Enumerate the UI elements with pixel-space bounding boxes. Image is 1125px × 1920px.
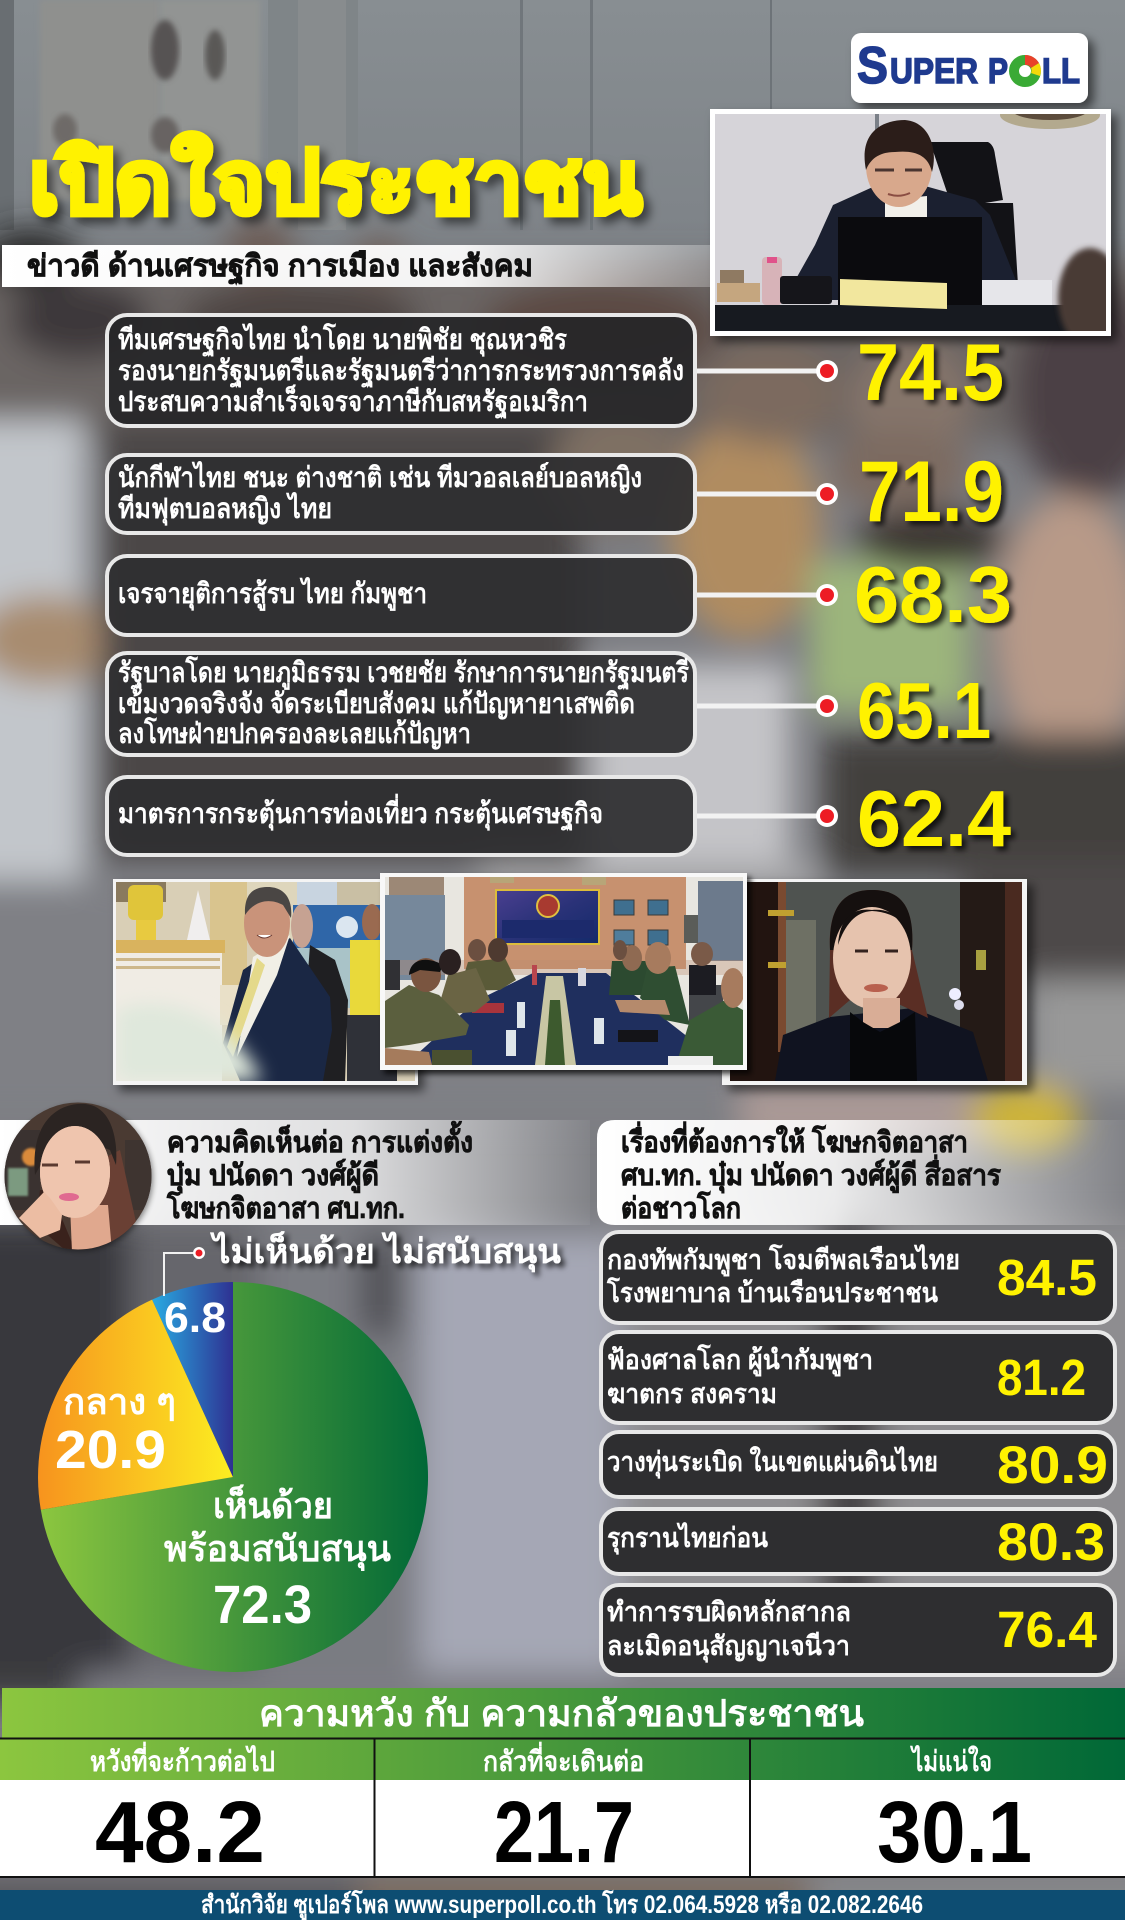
issue row 2: 81.2 — [997, 1349, 1086, 1406]
slice: disagree 6.8 — [152, 1282, 233, 1477]
header band: issues to communicate — [597, 1120, 1125, 1225]
issue row 4 — [601, 1509, 1115, 1574]
logo wordmark: P — [988, 52, 1008, 91]
slice: agree 72.3 — [41, 1282, 428, 1672]
dot 3 — [816, 584, 838, 606]
photo: military meeting — [380, 873, 747, 1070]
header text left: ความคิดเห็นต่อ การแต่งตั้ง — [167, 1120, 473, 1159]
value 71.9: 71.9 — [859, 444, 1004, 540]
legend callout: disagree: ไม่เห็นด้วย ไม่สนับสนุน — [210, 1230, 561, 1273]
dot 4 — [816, 695, 838, 717]
news item 3 — [107, 556, 695, 635]
issue row 1: โรงพยาบาล บ้านเรือนประชาชน — [606, 1276, 938, 1308]
news item 5 — [107, 777, 695, 855]
header text right: ต่อชาวโลก — [621, 1190, 741, 1225]
logo donut — [1014, 55, 1041, 82]
label support: พร้อมสนับสนุน — [164, 1528, 391, 1572]
news item 1 — [107, 315, 695, 426]
header text right — [621, 1121, 1001, 1225]
label 6.8: 6.8 — [164, 1294, 226, 1342]
issue row 3 — [601, 1432, 1115, 1497]
subtitle band — [2, 245, 710, 287]
news item 4: รัฐบาลโดย นายภูมิธรรม เวชยชัย รักษาการนายกรัฐมนตรี — [118, 655, 689, 691]
news item 2 — [107, 455, 695, 533]
header band: opinion on appointment — [0, 1120, 590, 1225]
column header row: หวังที่จะก้าวต่อไป — [90, 1741, 275, 1777]
issue row 4: รุกรานไทยก่อน — [607, 1522, 768, 1555]
title: เปิดใจประชาชน — [29, 132, 642, 232]
portrait circle — [4, 1102, 153, 1252]
column header row — [0, 1739, 1125, 1780]
legend callout: disagree — [164, 1230, 561, 1296]
table title bar: ความหวัง กับ ความกลัวของประชาชน — [259, 1693, 864, 1734]
issue row 2 — [601, 1332, 1115, 1423]
news item 4 — [107, 653, 695, 755]
logo wordmark: S — [857, 37, 888, 95]
news item 1: ทีมเศรษฐกิจไทย นำโดย นายพิชัย ชุณหวชิร — [118, 322, 567, 358]
value 65.1: 65.1 — [857, 666, 991, 755]
logo wordmark: LL — [1042, 52, 1080, 91]
photo: politician smiling — [113, 879, 418, 1085]
footer bar: สำนักวิจัย ซูเปอร์โพล www.superpoll.co.th โทร 02.064.5928 หรือ 02.082.2646 — [201, 1889, 923, 1920]
issue row 1: กองทัพกัมพูชา โจมตีพลเรือนไทย — [607, 1243, 960, 1277]
value row: 30.1 — [877, 1784, 1032, 1881]
value row: 48.2 — [95, 1784, 265, 1881]
issue row 5: ละเมิดอนุสัญญาเจนีวา — [607, 1631, 850, 1663]
value 74.5: 74.5 — [857, 328, 1004, 418]
column header row: ไม่แน่ใจ — [910, 1745, 992, 1777]
news item 1: รองนายกรัฐมนตรีและรัฐมนตรีว่าการกระทรวงการคลัง — [118, 355, 684, 389]
hope and fear table — [0, 1688, 1125, 1881]
header text left — [166, 1120, 473, 1225]
logo wordmark — [857, 37, 1080, 95]
issue row 2: ฆาตกร สงคราม — [607, 1379, 777, 1409]
photo: woman spokesperson — [722, 879, 1027, 1085]
header text right: ศบ.ทก. บุ๋ม ปนัดดา วงศ์ผู้ดี สื่อสาร — [621, 1154, 1001, 1193]
header text left: บุ๋ม ปนัดดา วงศ์ผู้ดี — [167, 1158, 379, 1193]
label 72.3: 72.3 — [213, 1575, 312, 1635]
issue row 3: วางทุ่นระเบิด ในเขตแผ่นดินไทย — [607, 1446, 938, 1479]
issue row 4: 80.3 — [997, 1513, 1105, 1572]
dot 1 — [816, 360, 838, 382]
news item 2: นักกีฬาไทย ชนะ ต่างชาติ เช่น ทีมวอลเลย์บอลหญิง — [118, 461, 642, 494]
subtitle text: ข่าวดี ด้านเศรษฐกิจ การเมือง และสังคม — [27, 250, 533, 286]
column header row: กลัวที่จะเดินต่อ — [483, 1741, 644, 1777]
footer bar — [0, 1889, 1125, 1920]
header text left: โฆษกจิตอาสา ศบ.ทก. — [166, 1190, 405, 1225]
connector lines — [697, 371, 820, 816]
value row — [0, 1780, 1125, 1881]
issue row 5: ทำการรบผิดหลักสากล — [607, 1597, 851, 1627]
value 62.4: 62.4 — [857, 774, 1012, 863]
news item 4: ลงโทษฝ่ายปกครองละเลยแก้ปัญหา — [118, 716, 471, 750]
photo: deputy prime minister at desk — [710, 100, 1122, 348]
slice: neutral 20.9 — [38, 1300, 233, 1510]
table title bar — [2, 1688, 1125, 1738]
header text right: เรื่องที่ต้องการให้ โฆษกจิตอาสา — [621, 1121, 968, 1159]
label agree: เห็นด้วย — [213, 1483, 333, 1526]
news item 5: มาตรการกระตุ้นการท่องเที่ยว กระตุ้นเศรษฐกิจ — [118, 793, 603, 832]
news item 4: เข้มงวดจริงจัง จัดระเบียบสังคม แก้ปัญหายาเสพติด — [118, 688, 635, 720]
issue row 5: 76.4 — [997, 1601, 1098, 1658]
label neutral: กลาง ๆ — [63, 1381, 176, 1422]
value row: 21.7 — [494, 1784, 634, 1881]
news item 3: เจรจายุติการสู้รบ ไทย กัมพูชา — [118, 577, 427, 611]
issue row 1 — [601, 1232, 1115, 1323]
issue row 1: 84.5 — [997, 1249, 1097, 1306]
logo wordmark: UPER — [890, 52, 978, 91]
issue row 2: ฟ้องศาลโลก ผู้นำกัมพูชา — [607, 1343, 873, 1377]
dot 5 — [816, 805, 838, 827]
label 20.9: 20.9 — [55, 1420, 166, 1480]
issue row 3: 80.9 — [997, 1436, 1108, 1495]
issue row 5 — [601, 1585, 1115, 1675]
news item 1: ประสบความสำเร็จเจรจาภาษีกับสหรัฐอเมริกา — [118, 384, 588, 420]
pie chart — [38, 1282, 428, 1672]
dot 2 — [816, 483, 838, 505]
logo card — [851, 33, 1088, 103]
news item 2: ทีมฟุตบอลหญิง ไทย — [118, 492, 332, 526]
value 68.3: 68.3 — [854, 550, 1012, 639]
